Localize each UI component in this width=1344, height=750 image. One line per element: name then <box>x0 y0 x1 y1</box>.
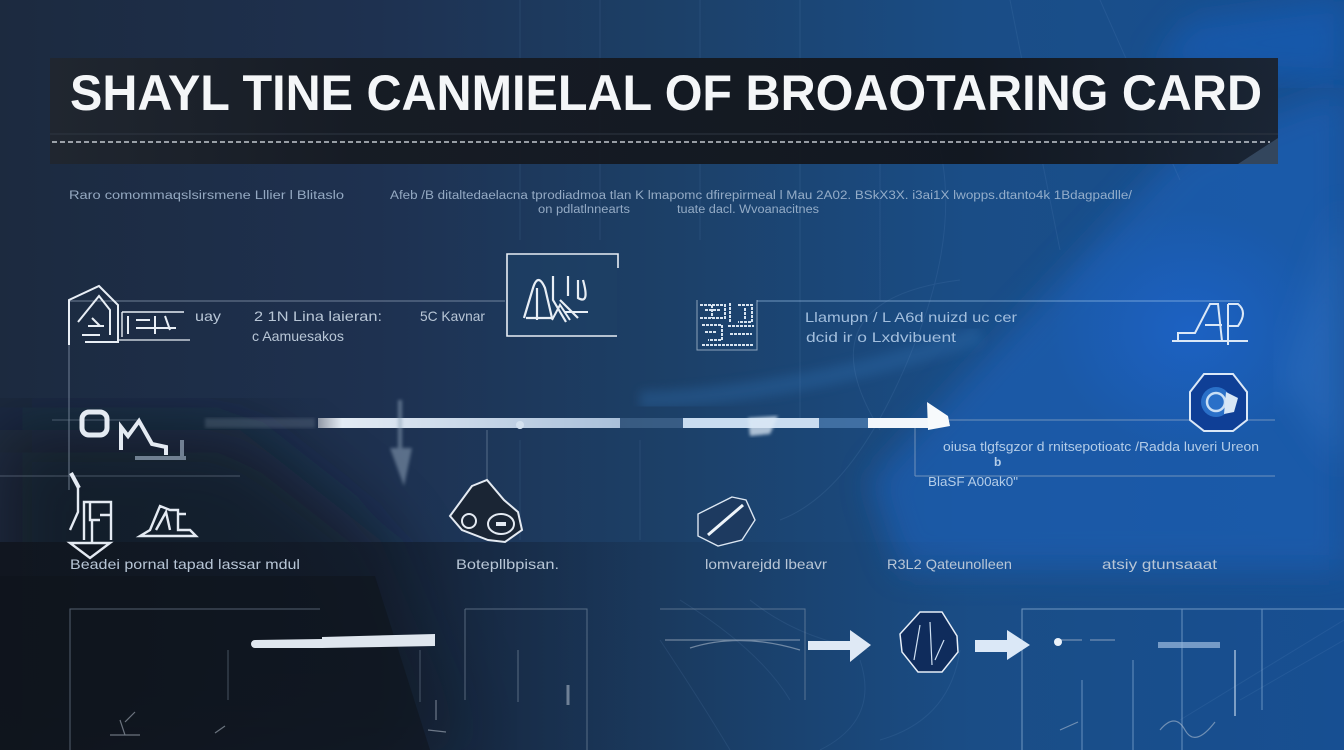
row 1 right text: Llamupn / L A6d nuizd uc cer <box>805 309 1017 325</box>
arrow: bottom right <box>975 630 1030 660</box>
icon: diagonal stone <box>698 497 755 546</box>
row 1 left text: 5C Kavnar <box>420 308 485 324</box>
icon: maze pattern <box>697 300 757 350</box>
row 2 labels: atsiy gtunsaaat <box>1102 556 1217 572</box>
icon: dark shield <box>900 612 958 672</box>
title: SHAYL TINE CANMIELAL OF BROAOTARING CARD <box>70 65 1262 121</box>
row 1 left text <box>195 308 485 344</box>
bottom bar <box>251 634 435 648</box>
small node and bar <box>1054 638 1220 648</box>
row 2 labels: lomvarejdd lbeavr <box>705 556 827 572</box>
icon: tower <box>70 486 111 558</box>
icon: house blueprint <box>69 286 190 345</box>
intro text: Raro comommaqslsirsmene Lllier l Blitaslo <box>69 190 344 202</box>
row 2 labels <box>70 556 1217 572</box>
intro text: on pdlatlnnearts <box>538 204 630 216</box>
intro text: Afeb /B ditaltedaelacna tprodiadmoa tlan K lmapomc dfirepirmeal l Mau 2A02. BSkX3X. i3ai1X lwopps.dtanto4k 1Bdagpadlle/ <box>390 190 1133 202</box>
row 1 left text: c Aamuesakos <box>252 328 344 344</box>
row 2 labels: Beadei pornal tapad lassar mdul <box>70 556 300 572</box>
row 2 labels: R3L2 Qateunolleen <box>887 556 1012 572</box>
icon: mountains <box>140 506 196 536</box>
icon: framed figures <box>507 254 618 336</box>
icon: rounded square and wave <box>71 412 186 488</box>
row 1 right text: dcid ir o Lxdvibuent <box>806 329 956 345</box>
row 1 left text: uay <box>195 308 221 324</box>
bottom frame lines <box>70 609 1344 750</box>
mid right caption: oiusa tlgfsgzor d rnitsepotioatc /Radda luveri Ureon <box>943 440 1259 454</box>
icon: AP emblem <box>1172 304 1248 345</box>
icon: faint down arrow <box>390 400 412 486</box>
title banner <box>50 58 1278 164</box>
background sketch lines <box>520 0 1344 750</box>
icon: octagon badge <box>1190 374 1247 431</box>
bottom sketch marks <box>110 640 1215 737</box>
row 1 connector lines <box>0 301 1275 490</box>
arrow: bottom left <box>808 630 871 662</box>
mid right caption: b <box>994 455 1001 469</box>
row 1 right text <box>805 309 1017 345</box>
mid right caption <box>928 440 1259 489</box>
intro text <box>69 190 1133 216</box>
icon: hooded node <box>450 480 522 542</box>
row 2 labels: Botepllbpisan. <box>456 556 559 572</box>
intro text: tuate dacl. Wvoanacitnes <box>677 204 819 216</box>
timeline arrow bar <box>205 402 950 436</box>
row 1 left text: 2 1N Lina laieran: <box>254 308 382 324</box>
mid right caption: BlaSF A00ak0" <box>928 475 1018 489</box>
